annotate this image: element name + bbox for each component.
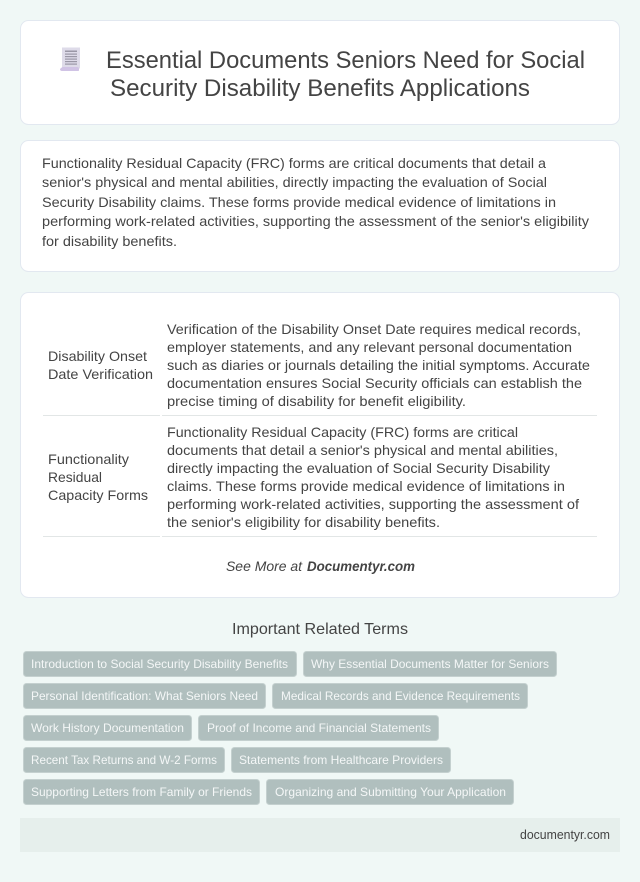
icon: document scroll — [60, 48, 80, 71]
tag — [24, 716, 192, 740]
tag — [24, 652, 296, 676]
panel: documents table — [20, 292, 620, 598]
see more link: Documentyr.com — [307, 558, 415, 574]
row description: such as diaries or journals detailing the initial symptoms. Accurate — [167, 357, 590, 373]
row description: directly impacting the evaluation of Social Security Disability — [167, 460, 550, 476]
row description: employer statements, and any relevant personal documentation — [167, 339, 572, 355]
table row: functionality residual capacity forms — [48, 424, 579, 530]
tag: Why Essential Documents Matter for Seniors — [311, 657, 549, 671]
title: Essential Documents Seniors Need for Social — [106, 47, 585, 74]
panel: introduction — [20, 140, 620, 272]
row label: Disability Onset — [48, 348, 147, 364]
row label: Date Verification — [48, 366, 153, 382]
tag — [24, 748, 224, 772]
text block: introduction paragraph — [42, 155, 589, 249]
row description: Functionality Residual Capacity (FRC) forms are critical — [167, 424, 518, 440]
tag — [24, 780, 260, 804]
row description — [167, 424, 579, 530]
row description: precise timing of disability for benefit eligibility. — [167, 393, 466, 409]
row description: performing work-related activities, supporting the assessment of — [167, 496, 579, 512]
tag — [266, 780, 514, 804]
tag — [24, 684, 266, 708]
row description: documents that detail a senior's physical and mental abilities, — [167, 442, 558, 458]
text block: introduction paragraph: Functionality Residual Capacity (FRC) forms are critical documents that detail a — [42, 155, 546, 171]
tag list: related terms — [24, 652, 556, 804]
heading: important related terms: Important Related Terms — [232, 621, 408, 638]
see more link: See More at — [226, 558, 303, 574]
row description — [167, 321, 590, 409]
text block: introduction paragraph: senior's physical and mental abilities, directly impacting the evaluation of Social — [42, 174, 547, 190]
tag — [198, 716, 438, 740]
row label: Functionality — [48, 451, 129, 467]
row description: documentation ensures Social Security officials can establish the — [167, 375, 582, 391]
table row: disability onset date verification — [48, 321, 590, 409]
text block: introduction paragraph: for disability benefits. — [42, 233, 177, 249]
tag — [304, 652, 556, 676]
footer site name: documentyr.com — [520, 828, 610, 842]
row description: claims. These forms provide medical evidence of limitations in — [167, 478, 565, 494]
tag — [232, 748, 450, 772]
tag: Statements from Healthcare Providers — [239, 753, 443, 767]
row label — [48, 451, 148, 503]
tag: Medical Records and Evidence Requirements — [281, 689, 520, 703]
row description: the senior's eligibility for disability benefits. — [167, 514, 440, 530]
row label — [48, 348, 153, 382]
footer — [20, 818, 620, 852]
tag: Supporting Letters from Family or Friends — [31, 785, 252, 799]
tag: Proof of Income and Financial Statements — [207, 721, 431, 735]
tag: Introduction to Social Security Disability Benefits — [31, 657, 288, 671]
text block: introduction paragraph: Security Disability claims. These forms provide medical evidence of limitations in — [42, 194, 556, 210]
row label: Capacity Forms — [48, 487, 148, 503]
text block: introduction paragraph: performing work-related activities, supporting the assessment of the senior's eligibility — [42, 213, 589, 229]
tag: Work History Documentation — [31, 721, 184, 735]
panel: title card — [20, 20, 620, 124]
row label: Residual — [48, 469, 102, 485]
tag: Recent Tax Returns and W-2 Forms — [31, 753, 217, 767]
see more link — [226, 558, 415, 574]
tag — [272, 684, 528, 708]
tag: Organizing and Submitting Your Application — [275, 785, 506, 799]
row description: Verification of the Disability Onset Date requires medical records, — [167, 321, 581, 337]
title — [106, 47, 585, 102]
title: Security Disability Benefits Applications — [110, 75, 530, 102]
tag: Personal Identification: What Seniors Need — [31, 689, 258, 703]
